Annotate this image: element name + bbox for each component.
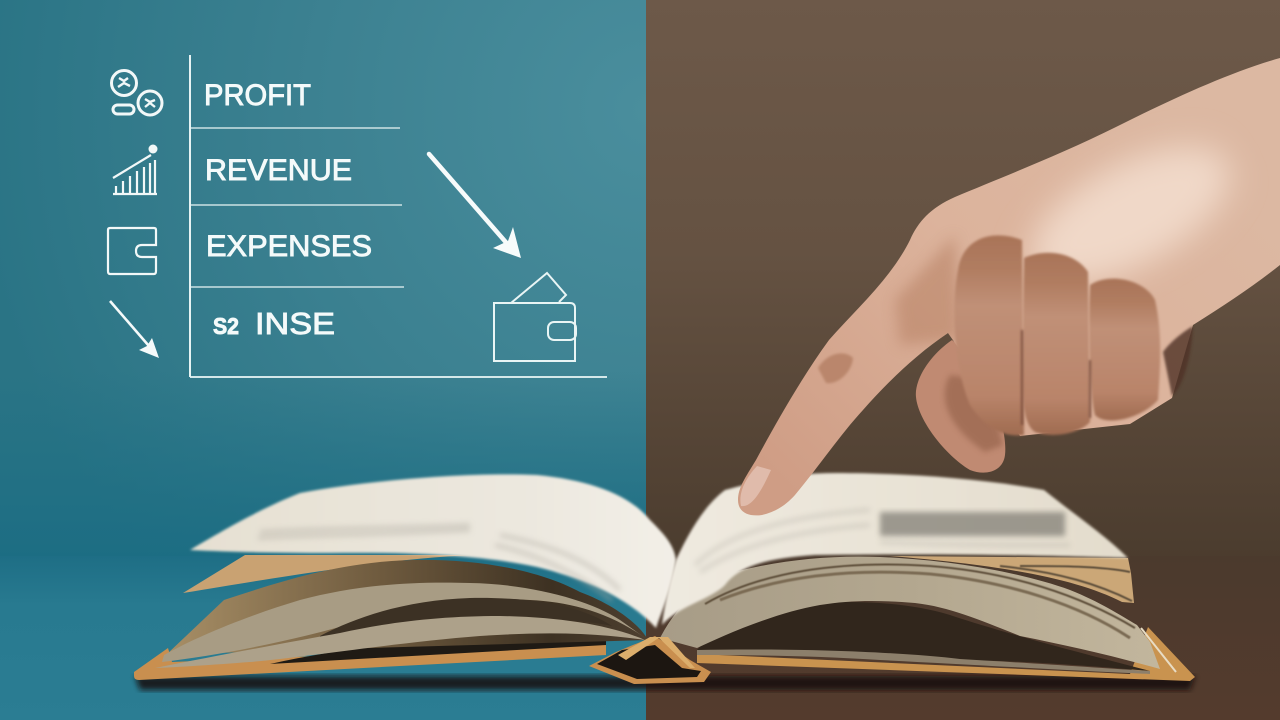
finger two bbox=[1022, 253, 1090, 435]
financial chart diagram bbox=[108, 55, 607, 377]
label: EXPENSES: EXPENSES bbox=[206, 230, 372, 263]
curled lower finger bbox=[916, 340, 1005, 473]
index knuckle crease bbox=[818, 353, 853, 383]
fingernail bbox=[740, 466, 771, 506]
blurred page text, left bbox=[258, 525, 620, 600]
left dark gap above cover bbox=[270, 634, 606, 664]
right main page stack bbox=[660, 557, 1160, 669]
blurred page text, right bbox=[695, 510, 1070, 572]
teal table surface bbox=[0, 556, 646, 720]
right cover strip bbox=[697, 627, 1195, 681]
arrow: small down-right bbox=[110, 301, 159, 358]
palm hollow bbox=[1163, 326, 1193, 396]
curled finger shading bbox=[945, 375, 1003, 452]
icon: coins bbox=[112, 70, 162, 115]
left orange flap bbox=[183, 555, 490, 593]
top left page bbox=[190, 474, 676, 628]
shadow under book bbox=[135, 676, 1195, 690]
arrow: large down-right bbox=[429, 154, 521, 258]
blurred dark block, right page bbox=[880, 512, 1065, 536]
left middle page band bbox=[162, 583, 648, 662]
icon: rising bar chart bbox=[113, 144, 158, 194]
left dark wedge bbox=[166, 560, 648, 655]
vertical axis and row dividers bbox=[190, 55, 607, 377]
brown table surface bbox=[646, 556, 1280, 720]
finger one bbox=[954, 235, 1024, 436]
open book bbox=[134, 473, 1195, 690]
finger three bbox=[1089, 279, 1160, 420]
highlight on back of hand bbox=[895, 119, 1251, 345]
right orange top flaps bbox=[890, 556, 1134, 603]
left lower page band bbox=[155, 616, 645, 668]
left dark gap bbox=[320, 598, 612, 640]
right brown background panel bbox=[646, 0, 1280, 560]
left teal background panel bbox=[0, 0, 646, 560]
right lower leaf bbox=[697, 649, 1150, 674]
top right page bbox=[662, 473, 1128, 625]
label: PROFIT: PROFIT bbox=[204, 79, 311, 112]
icon: simple wallet bbox=[108, 228, 156, 274]
label: INSE: INSE bbox=[255, 306, 335, 341]
label: S2 glyphs: S2 bbox=[213, 313, 239, 339]
icon: large wallet with card bbox=[494, 273, 576, 361]
page cut edge highlight bbox=[1141, 628, 1176, 672]
main hand shape bbox=[738, 58, 1280, 515]
label: REVENUE: REVENUE bbox=[205, 154, 352, 187]
right stack dark lines bbox=[705, 565, 1135, 638]
hand pointing at the book bbox=[738, 58, 1280, 515]
finger gaps bbox=[1022, 330, 1090, 425]
right dark hollow bbox=[697, 602, 1150, 671]
book spine bbox=[589, 636, 711, 684]
left cover strip bbox=[134, 644, 606, 680]
